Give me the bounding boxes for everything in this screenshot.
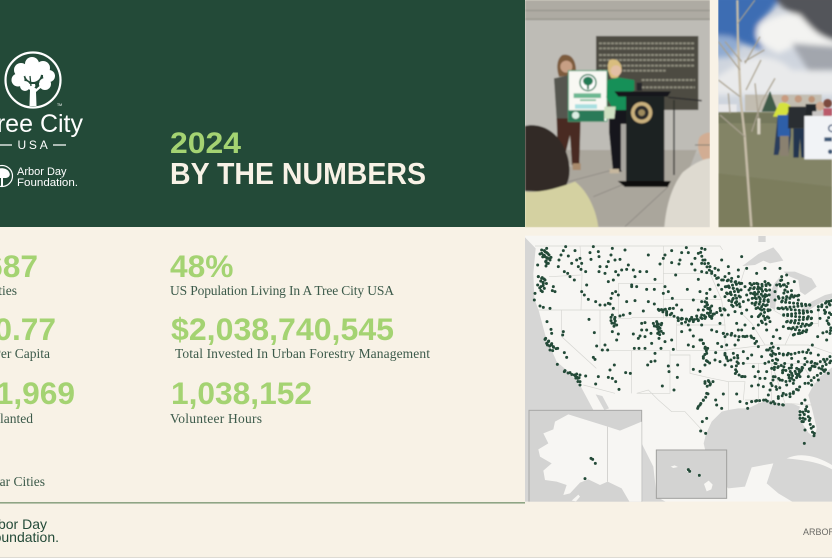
panel: dark green header (0, 0, 525, 227)
stat: population: US Population Living In A Tree City USA (170, 283, 394, 298)
state borders (535, 246, 832, 433)
photo: sign presentation at podium (525, 0, 710, 227)
logo: Arbor Day Foundation: Arbor Day (17, 166, 67, 178)
stat: total invested: $2,038,740,545 (171, 311, 394, 347)
photo: tree planting volunteers (712, 0, 832, 227)
water: oceans and lakes (525, 236, 832, 503)
logo: Arbor Day Foundation (0, 166, 78, 189)
stat: total invested: Total Invested In Urban Forestry Management (175, 346, 430, 361)
stat: population: 48% (170, 248, 233, 284)
logo: Arbor Day Foundation: Foundation. (17, 177, 78, 189)
city dots (534, 247, 830, 443)
map: Tree City USA communities (525, 236, 832, 503)
dense city clusters (538, 250, 832, 437)
heading: by the numbers: BY THE NUMBERS (170, 156, 426, 191)
inset: Hawaii (656, 450, 727, 498)
inset: Alaska (529, 410, 642, 503)
icon: tree in circle: TM (57, 103, 62, 107)
heading: 2024: 2024 (170, 127, 241, 160)
stat: total invested (171, 311, 430, 361)
text: USA: USA (17, 138, 51, 152)
stat: population (170, 248, 394, 298)
stat: volunteer hours: 1,038,152 (171, 375, 312, 411)
footer logo: Arbor Day Foundation (0, 516, 59, 545)
logo: Tree City USA (0, 52, 83, 189)
stat: volunteer hours: Volunteer Hours (170, 411, 262, 426)
